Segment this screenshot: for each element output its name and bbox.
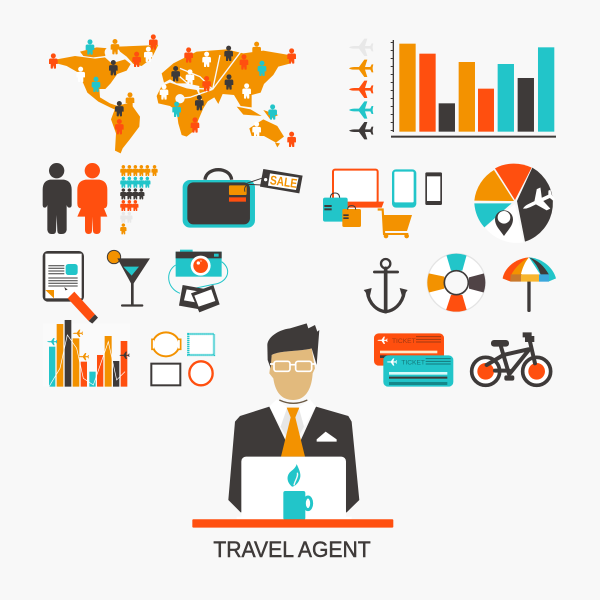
tie: [281, 408, 305, 457]
bars: [399, 44, 554, 132]
travel agent figure: [192, 323, 393, 562]
icon: tablet: [392, 169, 416, 208]
icon: suitcase with sale tag: [183, 169, 303, 228]
pie chart: [474, 164, 558, 243]
icon: tickets: TICKET: [401, 359, 425, 366]
icon: shopping cart: [378, 208, 412, 238]
title: TRAVEL AGENT: [213, 537, 371, 562]
icon: tablet with article and pencil: [43, 251, 98, 324]
icon: suitcase with sale tag: SALE: [269, 173, 298, 191]
icon: phone: [425, 172, 442, 205]
laptop: [237, 457, 352, 520]
icons: tablet, cocktail, camera, chart, frames: [43, 250, 228, 387]
icon: camera with photos: [169, 250, 228, 312]
icons: anchor, lifebuoy, umbrella, tickets, bicycle: [364, 253, 556, 387]
infographic: travel agent: [42, 34, 556, 558]
pocket square: [317, 432, 337, 442]
icon: bicycle: [472, 332, 551, 385]
icon: woman: [77, 163, 107, 234]
icons: devices, shopping, pie chart: [323, 164, 558, 243]
frames: [151, 332, 214, 385]
world map with people: [49, 34, 296, 153]
icon: cocktail: [107, 250, 150, 307]
desk: [192, 519, 393, 528]
suit: [228, 407, 359, 512]
population pyramid: [120, 165, 158, 234]
face: [269, 348, 315, 400]
icon: shopping bags: [323, 193, 361, 227]
icon: beach umbrella: [503, 257, 556, 312]
plane legend: [349, 39, 373, 139]
glasses: [270, 361, 316, 371]
icon: tickets: TICKET: [392, 338, 416, 345]
icon: lifebuoy: [426, 253, 487, 313]
icon: man: [43, 163, 72, 234]
icon: anchor: [364, 259, 408, 312]
axes: [391, 40, 556, 138]
icon: coffee mug with steam: [283, 464, 312, 520]
hair: [267, 323, 319, 368]
icon: tickets: [374, 333, 453, 387]
chart with planes and line: [43, 320, 130, 387]
bar chart with plane legend: [349, 39, 556, 139]
icon: laptop: [333, 170, 384, 208]
icons: man, woman, population pyramid, suitcase: [43, 163, 303, 234]
neck shadow: [279, 400, 307, 403]
shirt collar: [269, 399, 316, 440]
